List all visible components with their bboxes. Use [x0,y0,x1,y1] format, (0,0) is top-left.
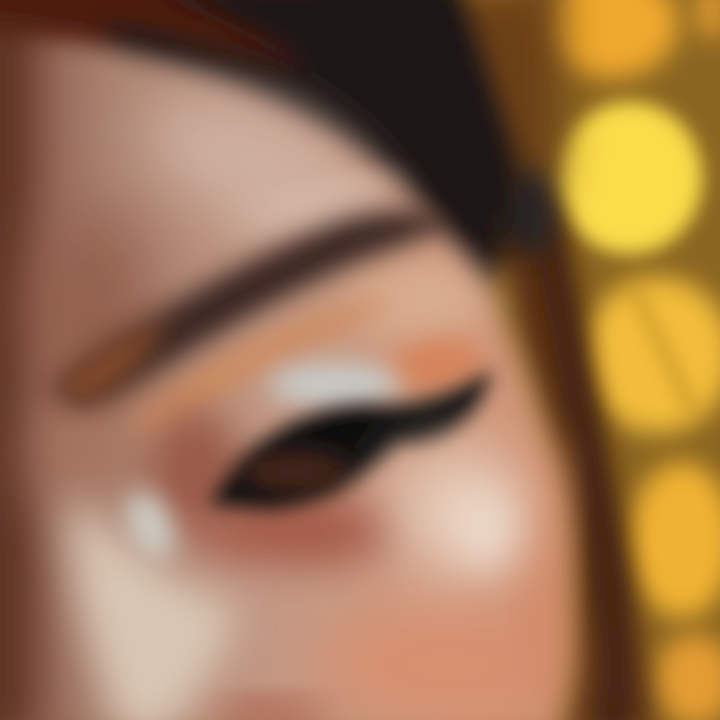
lower left warm [30,390,130,510]
eyebrow [55,211,455,405]
right cheek edge [525,440,565,700]
bokeh lights [458,0,720,720]
pale band above brow [239,177,401,233]
hair: top backdrop brown [440,0,560,240]
eyelid and eye shadow [130,262,490,566]
hair: dark sweep across top [100,0,520,300]
lower right warm cheek [320,610,560,720]
dark hair edge over forehead [150,0,515,250]
face skin [0,0,565,720]
temple warm [30,210,150,410]
forehead highlight [123,69,387,261]
hair: strand falling down right side [500,168,655,720]
top-left auburn hairline [0,0,320,65]
eye: lash line and wing [210,370,492,510]
under-eye concealer highlight [68,448,530,720]
left edge shadow [0,0,30,720]
